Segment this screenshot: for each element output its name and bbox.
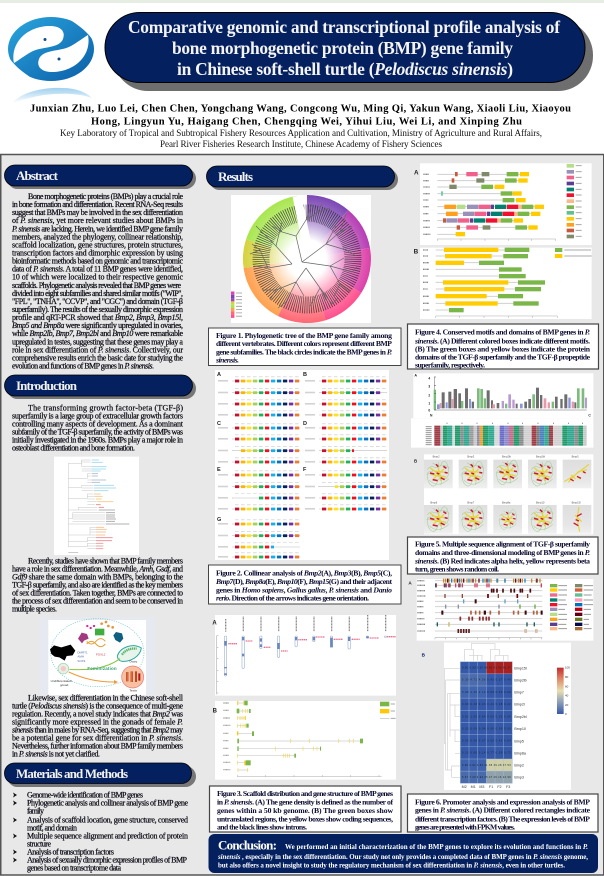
figure: sex differentiation diagram	[40, 617, 155, 695]
heading: Introduction	[4, 375, 196, 399]
colorbar: 80	[565, 675, 569, 679]
figure 5B: 3D protein models: Bmp10	[536, 500, 545, 504]
figure 6B: expression heatmap: B	[422, 653, 426, 658]
text block: introduction paragraph 1: superfamily is a large group of extracellular growth factors	[12, 411, 183, 420]
text block: abstract: transcription factors and dimorphic expression by using	[12, 248, 183, 258]
colorbar: 100	[565, 666, 570, 670]
figure 5B: 3D protein models: Bmp2bl	[536, 454, 545, 458]
authors	[30, 104, 571, 128]
caption: figure 2: rerio. Direction of the arrows indicates gene orientation.	[216, 594, 369, 603]
text block: abstract: role in sex differentiation of P. sinensis. Collectively, our	[12, 345, 183, 354]
colorbar: 0	[565, 712, 567, 716]
figure 3A: scaffold distribution	[212, 615, 396, 696]
conclusion panel: We performed an initial characterization of the BMP genes to explore its evolution and functions in P.	[285, 843, 588, 851]
figure 2: collinear analysis: C	[217, 421, 221, 427]
caption: figure 4	[408, 324, 598, 369]
figure 6B: expression heatmap: Bmp10	[514, 727, 526, 731]
text block: abstract: comprehensive results enrich the basic date for studying the	[12, 353, 183, 362]
title pill: in Chinese soft-shell turtle (Pelodiscus sinensis)	[177, 59, 513, 79]
arrows	[69, 659, 120, 684]
text block: introduction paragraph 3: sinensis than in males by RNA-Seq, suggesting that Bmp2 may	[12, 725, 183, 734]
colorbar: 20	[565, 703, 569, 707]
caption: figure 5: domains and three-dimensional modeling of BMP genes in P.	[415, 548, 590, 557]
caption: figure 6: genes are presented with FPKM values.	[415, 822, 515, 831]
text block: abstract: 10 of which were localized to their respective genomic	[12, 273, 183, 282]
caption: figure 3: and the black lines show introns.	[217, 823, 307, 832]
figure 4B: protein domains: B	[414, 248, 419, 255]
heading: Abstract	[4, 165, 196, 189]
caption: figure 1: gene subfamilies. The black circles indicate the BMP genes in P.	[216, 347, 392, 356]
figure 2: collinear analysis: F	[303, 467, 307, 473]
text block: introduction paragraph 2: Gdf9 share the same domain with BMPs, belonging to the	[12, 572, 183, 581]
sequence logo: 3	[428, 385, 430, 389]
text block: abstract: evolution and functions of BMP genes in P. sinensis.	[12, 362, 154, 370]
figure 6B: expression heatmap: Bmp7	[514, 691, 524, 695]
text block: abstract: data of P. sinensis. A total of 11 BMP genes were identified,	[12, 265, 183, 274]
list: methods: Phylogenetic analysis and collinear analysis of BMP gene	[27, 798, 188, 807]
list: methods: Multiple sequence alignment and prediction of protein	[27, 831, 188, 840]
figure 6B: expression heatmap: Bmp8a	[514, 751, 527, 755]
figure 6B: expression heatmap: 3.08 1.40 2.12 0.09 0.03 0.06	[462, 691, 511, 694]
figure 6B: expression heatmap: Bmp15l	[514, 666, 527, 670]
figure 6B: expression heatmap	[422, 643, 571, 790]
conclusion panel: sinensis , especially in the sex differentiation. Our study not only provides a completed data of BMP genes in P. sinensis genome,	[217, 853, 588, 861]
legend	[231, 292, 242, 318]
figure 6B: expression heatmap: 0.62 1.05 0.64 0.05 0.03 0.06	[462, 715, 511, 718]
figure: sex differentiation diagram: gonad	[60, 683, 69, 687]
text block: introduction paragraph 3: Nevertheless, further information about BMP family members	[12, 741, 183, 750]
affiliation: Key Laboratory of Tropical and Subtropical Fishery Resources Application and Cultivation, Ministry of Agriculture and Rural Affairs,	[60, 128, 542, 138]
figure 5B: 3D protein models: Bmp7	[467, 500, 475, 504]
sequence alignment	[426, 423, 587, 446]
caption: figure 4: domains of the TGF-β superfamily and the TGF-β propeptide	[415, 352, 591, 361]
text block: abstract: Bone morphogenetic proteins (BMPs) play a crucial role	[28, 192, 183, 201]
figure 5A: sequence logo and alignment: A	[414, 373, 417, 377]
caption: figure 3: genes within a 50 kb genome. (B) The green boxes show	[217, 806, 393, 815]
text block: abstract: P. sinensis are lacking. Herein, we identified BMP gene family	[11, 224, 183, 233]
figure: sex differentiation diagram: Undifferentiated	[51, 679, 72, 683]
list: methods: genes based on transcriptome data	[27, 863, 121, 872]
caption: figure 6: different transcription factors. (B) The expression levels of BMP	[415, 814, 590, 823]
figure 4B: protein domains	[414, 248, 592, 319]
caption: figure 2: genes in Homo sapiens, Gallus gallus, P. sinensis and Danio	[216, 585, 392, 594]
figure 6B: expression heatmap: Bmp2bl	[514, 715, 527, 719]
caption: figure 5: sinensis. (B) Red indicates alpha helix, yellow represents beta	[414, 556, 590, 565]
caption: figure 6: Figure 6. Promoter analysis and expression analysis of BMP	[415, 797, 590, 806]
sequence logo: 0	[428, 409, 430, 413]
text block: abstract: "FPL", "TNHA", "CCVP", and "CGC") and domain (TGF-β	[12, 297, 183, 306]
logo: institute swirl	[6, 17, 96, 103]
text block: introduction paragraph 1	[12, 403, 184, 452]
text block: abstract: suggest that BMPs may be involved in the sex differentiation	[12, 208, 183, 217]
authors: Hong, Lingyun Yu, Haigang Chen, Chengqing Wei, Yihui Liu, Wei Li, and Xinping Zhu	[91, 116, 522, 128]
figure 6B: expression heatmap: Bmp2	[514, 764, 524, 768]
figure 5B: 3D protein models: B	[414, 458, 417, 463]
text block: introduction paragraph 3: be a potential gene for sex differentiation in P. sinensis.	[12, 733, 183, 742]
figure 6B: expression heatmap: F2	[497, 785, 502, 789]
figure 6B: expression heatmap: 0.10 0.06 0.14 0.77 0.39 0.72	[462, 752, 511, 755]
affiliation: Pearl River Fisheries Research Institute, Chinese Academy of Fishery Sciences	[160, 139, 442, 149]
icon: DNA helix	[87, 639, 105, 647]
list: methods: motif, and domain	[27, 823, 77, 832]
figure 6B: expression heatmap: 5.67 7.29 4.93 25.47 26.16 24.99	[462, 776, 511, 779]
title pill: Comparative genomic and transcriptional profile analysis of	[128, 17, 560, 37]
figure 5B: 3D protein models	[414, 454, 593, 534]
caption: figure 5: turn, green shows random coil.	[415, 564, 499, 573]
figure 5B: 3D protein models: Bmp5	[572, 454, 579, 458]
figure 5B: 3D protein models: Bmp2lb	[502, 454, 512, 458]
conclusion panel: but also offers a novel insight to study the regulatory mechanism of sex differentiation in P. sinensis, even in other turtles.	[218, 862, 565, 870]
legend	[550, 584, 593, 630]
caption: figure 3	[210, 786, 401, 832]
sequence logo	[428, 377, 591, 418]
figure 6B: expression heatmap: 5.30 4.72 4.56 0.43 0.37 0.46	[462, 679, 511, 682]
conclusion panel: Conclusion:	[218, 838, 277, 852]
figure 2: collinear analysis: A	[217, 372, 221, 378]
figure 4A: conserved motifs	[414, 163, 592, 245]
figure 6A: promoter analysis	[408, 579, 593, 641]
figure 5B: 3D protein models: Bmp8a	[502, 500, 511, 504]
figure 5B: 3D protein models: Bmp15l	[572, 500, 581, 504]
figure 6B: expression heatmap: F1	[489, 785, 493, 789]
figure 2: collinear analysis	[215, 370, 389, 560]
figure: sex differentiation diagram: Testis	[129, 688, 137, 692]
heading: Materials and Methods: Materials and Methods	[16, 766, 128, 781]
caption: figure 1: different vertebrates. Different colors represent different BMP	[216, 339, 392, 348]
caption: figure 6: genes in P. sinensis. (A) Different colored rectangles indicate	[415, 805, 591, 814]
sequence logo: 1	[428, 401, 430, 405]
icon: ovary	[117, 646, 141, 661]
caption: figure 6	[408, 794, 598, 832]
caption: figure 3: in P. sinensis. (A) The gene density is defined as the number of	[217, 798, 393, 807]
figure 6B: expression heatmap: 0.00 0.30 0.30 96.83 91.93 96.37	[462, 667, 511, 670]
label: genes: AMH	[77, 655, 84, 659]
caption: figure 5: Figure 5. Multiple sequence alignment of TGF-β superfamily	[415, 539, 590, 548]
heading: Results: Results	[218, 169, 253, 184]
text block: introduction paragraph 2: have a role in sex differentiation. Meanwhile, Amh, Gsdf, and	[12, 564, 183, 573]
figure 6A: promoter analysis: A	[408, 581, 412, 586]
text block: abstract: scaffold localization, gene structures, protein structures,	[12, 240, 183, 249]
text block: introduction paragraph 3: regulation. Recently, a novel study indicates that Bmp2 was	[12, 709, 183, 718]
figure 6B: expression heatmap: 0.90 0.62 0.83 41.65 39.28 37.53	[462, 764, 511, 767]
text block: introduction paragraph 2: the process of sex differentiation and seem to be conserved in	[12, 596, 183, 605]
caption: figure 4: superfamily, respectively.	[415, 360, 485, 369]
list: methods	[13, 790, 188, 872]
caption: figure 4: (B) The green boxes and yellow boxes indicate the protein	[415, 344, 591, 353]
caption: figure 3: untranslated regions, the yellow boxes show coding sequences,	[217, 814, 393, 823]
heading: Abstract: Abstract	[16, 168, 59, 183]
figure 1: circular phylogenetic tree	[231, 195, 371, 323]
figure 6B: expression heatmap: M3	[479, 785, 484, 789]
caption: figure 1	[208, 328, 401, 366]
icon: gene cluster	[78, 621, 123, 643]
figure 6B: expression heatmap: Bmp2lb	[514, 678, 527, 682]
icon: turtle silhouette	[50, 645, 75, 661]
sequence logo: 2	[428, 393, 430, 397]
figure 6B: expression heatmap: 0.05 0.08 0.06 0.00 0.00 0.00	[462, 727, 511, 730]
figure 5B: 3D protein models: Bmp2	[433, 454, 440, 458]
label: genes: FOXL2	[96, 652, 106, 656]
figure 6B: expression heatmap: 0.60 0.46 0.43 0.24 0.28 0.22	[462, 703, 511, 706]
text block: abstract	[11, 192, 183, 370]
text block: introduction paragraph 1: controlling many aspects of development. As a dominant	[12, 419, 184, 428]
caption: figure 2	[208, 565, 401, 604]
text block: introduction paragraph 3: turtle (Pelodiscus sinensis) is the consequence of multi-gene	[12, 701, 183, 710]
text block: abstract: divided into eight subfamilies and shared similar motifs ("WIP",	[12, 289, 183, 298]
text block: abstract: profile and qRT-PCR showed that Bmp2, Bmp3, Bmp15l,	[12, 313, 183, 322]
list: methods: Analysis of sexually dimorphic expression profiles of BMP	[27, 855, 188, 864]
text block: introduction paragraph 2	[12, 556, 183, 613]
figure 2: collinear analysis: E	[217, 467, 221, 473]
figure 6B: expression heatmap: F3	[506, 785, 510, 789]
icon: testis	[122, 666, 144, 688]
text block: introduction paragraph 2: multiple species.	[12, 604, 57, 613]
colorbar: 40	[565, 694, 569, 698]
text block: introduction paragraph 3	[12, 693, 184, 758]
list: methods: structure	[27, 839, 51, 848]
caption: figure 4: sinensis. (A) Different colored boxes indicate different motifs.	[414, 336, 590, 345]
sequence logo: N	[430, 414, 433, 418]
heading: Introduction: Introduction	[16, 378, 78, 393]
figure: sex differentiation diagram: Ovary	[129, 659, 138, 663]
figure 3B: gene structure	[213, 701, 396, 780]
figure 6B: expression heatmap: Bmp2l	[514, 703, 525, 707]
dendrograms	[444, 643, 508, 777]
figure 4A: conserved motifs: A	[414, 169, 419, 176]
label: genes: SOX9	[77, 659, 86, 663]
heading: Materials and Methods	[4, 763, 196, 787]
text block: introduction paragraph 3: Likewise, sex differentiation in the Chinese soft-shell	[28, 693, 184, 702]
label: genes	[77, 651, 106, 663]
top strip	[0, 0, 604, 3]
text block: abstract: in bone formation and differentiation. Recent RNA-Seq results	[12, 200, 183, 209]
label: genes: DMRT1	[77, 651, 88, 655]
figure 3A: scaffold distribution: A	[212, 620, 217, 626]
title pill	[105, 12, 593, 91]
text block: introduction paragraph 3: in P. sinensis is not yet clarified.	[12, 749, 100, 758]
caption: figure 5	[408, 537, 598, 574]
figure: sex differentiation diagram: Feminization	[87, 666, 117, 671]
title pill: bone morphogenetic protein (BMP) gene family	[172, 38, 513, 58]
text block: introduction paragraph 1: The transforming growth factor-beta (TGF-β)	[28, 403, 183, 412]
text block: introduction paragraph 1: initially investigated in the 1960s. BMPs play a major role in	[12, 435, 183, 444]
figure 6B: expression heatmap: 0.05 0.08 0.07 0.50 0.42 0.54	[462, 740, 511, 743]
text block: introduction paragraph 2: TGF-β superfamily, and also are identified as the key members	[12, 580, 183, 589]
caption: figure 2: Figure 2. Collinear analysis of Bmp2(A), Bmp3(B), Bmp5(C),	[216, 569, 392, 578]
figure 6B: expression heatmap: Bmp3	[514, 776, 524, 780]
list: methods: Analysis of transcription factors	[27, 847, 114, 856]
legend	[567, 164, 582, 238]
figure 2: collinear analysis: G	[217, 517, 221, 523]
caption: figure 1: Figure 1. Phylogenetic tree of the BMP gene family among	[216, 331, 392, 340]
sequence logo: C	[588, 414, 591, 418]
figure 6B: expression heatmap: M1	[471, 785, 476, 789]
icon: undifferentiated gonad	[58, 663, 69, 674]
chart: small phylogenetic tree	[54, 457, 139, 555]
conclusion panel	[208, 834, 598, 873]
caption: figure 2: Bmp7(D), Bmp8a(E), Bmp10(F), Bmp15(G) and their adjacent	[215, 577, 392, 586]
text block: abstract: Bmp5 and Bmp8a were significantly upregulated in ovaries,	[12, 321, 183, 330]
figure 5A: sequence logo and alignment	[411, 373, 593, 448]
figure 6B: expression heatmap: M2	[462, 785, 467, 789]
sequence logo: 4	[428, 377, 430, 381]
text block: abstract: scaffolds. Phylogenetic analysis revealed that BMP genes were	[12, 281, 181, 290]
text block: introduction paragraph 2: of sex differentiation. Taken together, BMPs are connected to	[12, 588, 183, 597]
text block: abstract: upregulated in testes, suggesting that these genes may play a	[12, 337, 183, 346]
authors: Junxian Zhu, Luo Lei, Chen Chen, Yongchang Wang, Congcong Wu, Ming Qi, Yakun Wang, Xiaoli Liu, Xiaoyou	[30, 104, 571, 114]
text block: introduction paragraph 1: osteoblast differentiation and bone formation.	[12, 443, 135, 452]
text block: abstract: members, analyzed the phylogeny, collinear relationship,	[12, 232, 183, 241]
figure 5B: 3D protein models: Bmp3	[467, 454, 475, 458]
list: methods: Analysis of scaffold location, gene structure, conserved	[27, 815, 188, 824]
text block: introduction paragraph 3: significantly more expressed in the gonads of female P.	[12, 717, 183, 726]
text block: abstract: superfamily). The results of the sexually dimorphic expression	[12, 305, 183, 314]
caption: figure 1: sinensis.	[215, 355, 239, 364]
caption: figure 4: Figure 4. Conserved motifs and domains of BMP genes in P.	[415, 327, 590, 336]
text block: introduction paragraph 1: subfamily of the TGF-β superfamily, the activity of BMPs was	[12, 427, 183, 436]
text block: abstract: bioinformatic methods based on genomic and transcriptomic	[12, 257, 183, 266]
affiliation	[60, 128, 542, 149]
figure 3B: gene structure: B	[213, 708, 218, 714]
list: methods: Genome-wide identification of BMP genes	[27, 790, 143, 799]
heading: Results	[206, 166, 398, 190]
figure 6B: expression heatmap: Bmp5	[514, 739, 524, 743]
text block: abstract: while Bmp2lb, Bmp7, Bmp2bl and Bmp10 were remarkable	[12, 329, 183, 338]
caption: figure 3: Figure 3. Scaffold distribution and gene structure of BMP genes	[217, 789, 393, 798]
colorbar	[557, 666, 570, 716]
list: methods: family	[27, 806, 44, 815]
text block: introduction paragraph 2: Recently, studies have shown that BMP family members	[28, 556, 183, 565]
figure 2: collinear analysis: B	[303, 372, 307, 378]
figure 2: collinear analysis: D	[303, 421, 307, 427]
colorbar: 60	[565, 684, 569, 688]
text block: abstract: of P. sinensis, yet more relevant studies about BMPs in	[12, 216, 183, 225]
figure 5B: 3D protein models: Bmp6	[430, 500, 438, 504]
